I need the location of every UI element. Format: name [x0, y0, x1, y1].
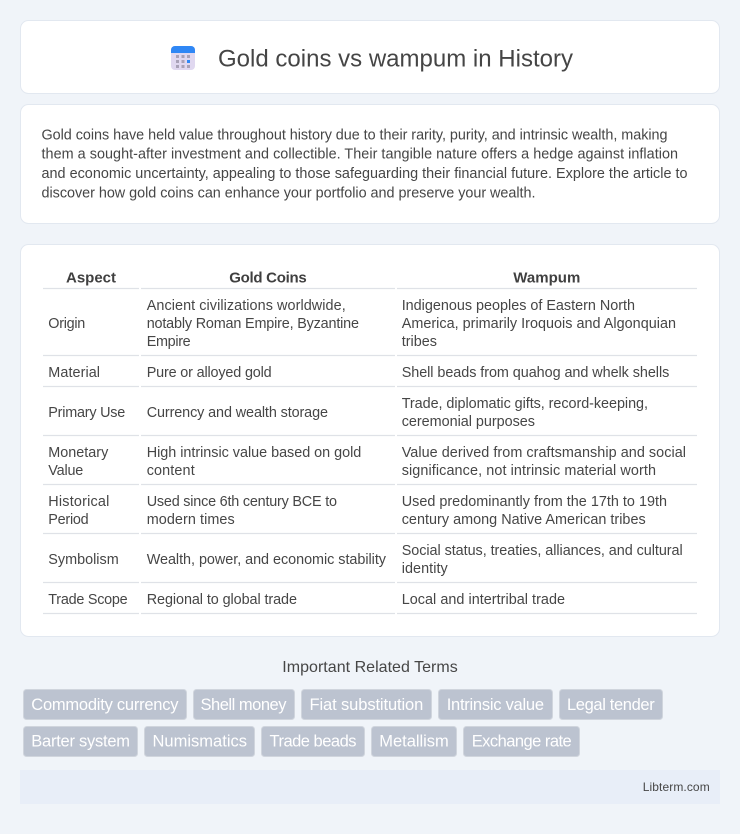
tag — [560, 690, 662, 720]
text block: intro paragraph: and economic uncertainty, appealing to those safeguarding their financial future. Explore the article to — [42, 166, 688, 182]
row: trade scope: Regional to global trade — [147, 592, 297, 608]
row: material: Pure or alloyed gold — [147, 365, 272, 381]
row: primary use: Currency and wealth storage — [147, 405, 328, 421]
row: trade scope: Local and intertribal trade — [402, 592, 565, 608]
row: monetary value: Monetary — [48, 445, 109, 461]
tag: Exchange rate — [472, 733, 572, 751]
row: monetary value — [48, 445, 686, 479]
tag: Commodity currency — [31, 696, 179, 714]
row: symbolism: Symbolism — [48, 552, 119, 568]
row: historical period: Used predominantly from the 17th to 19th — [402, 494, 667, 510]
text block: intro paragraph — [42, 127, 688, 201]
row: historical period: century among Native American tribes — [402, 512, 646, 528]
row: historical period: Historical — [48, 494, 109, 510]
tag: Metallism — [379, 733, 449, 751]
row: monetary value: Value — [48, 463, 83, 479]
tag — [144, 726, 254, 756]
row: symbolism: identity — [402, 561, 448, 577]
row: historical period — [48, 494, 667, 528]
row: historical period: Used since 6th century BCE to — [147, 494, 337, 510]
text block: intro paragraph: discover how gold coins can enhance your portfolio and preserve your wealth. — [42, 185, 536, 201]
text block: intro paragraph: them a sought-after investment and collectible. Their tangible nature offers a hedge against inflation — [42, 146, 678, 162]
row: symbolism: Wealth, power, and economic stability — [147, 552, 387, 568]
heading: related terms: Important Related Terms — [282, 659, 458, 676]
tag — [302, 690, 432, 720]
tag: Numismatics — [152, 733, 247, 751]
row: trade scope — [48, 592, 565, 608]
row: symbolism: Social status, treaties, alliances, and cultural — [402, 543, 683, 559]
panel: header — [20, 20, 720, 94]
tag: Intrinsic value — [447, 696, 544, 714]
row: material: Shell beads from quahog and whelk shells — [402, 365, 669, 381]
text block: intro paragraph: Gold coins have held value throughout history due to their rarity, purity, and intrinsic wealth, making — [42, 127, 668, 143]
row: primary use — [48, 396, 648, 430]
panel: intro — [20, 104, 720, 224]
tag: Barter system — [31, 733, 130, 751]
row: origin: notably Roman Empire, Byzantine — [147, 316, 359, 332]
row: origin: Indigenous peoples of Eastern North — [402, 298, 635, 314]
tag — [464, 726, 580, 756]
row: origin: Empire — [147, 334, 191, 350]
tag: Fiat substitution — [310, 696, 423, 714]
row: material — [48, 365, 669, 381]
tag — [438, 690, 552, 720]
table header: Gold Coins — [229, 270, 307, 287]
panel: comparison table — [20, 244, 720, 636]
row: primary use: Trade, diplomatic gifts, record-keeping, — [402, 396, 648, 412]
row: monetary value: Value derived from craftsmanship and social — [402, 445, 686, 461]
row: historical period: modern times — [147, 512, 235, 528]
title: Gold coins vs wampum in History — [218, 46, 573, 73]
tag: Trade beads — [270, 733, 356, 751]
table header: Wampum — [513, 270, 580, 287]
table header: Aspect — [66, 270, 116, 287]
row: origin: tribes — [402, 334, 437, 350]
footer credit: Libterm.com — [643, 780, 710, 794]
tags: related terms — [24, 690, 662, 756]
row: symbolism — [48, 543, 683, 577]
icon: calendar — [171, 46, 195, 70]
row: origin: Origin — [48, 316, 85, 332]
row: monetary value: significance, not intrinsic material worth — [402, 463, 656, 479]
row: monetary value: High intrinsic value based on gold — [147, 445, 361, 461]
tag — [24, 690, 186, 720]
row: monetary value: content — [147, 463, 195, 479]
row: origin: Ancient civilizations worldwide, — [147, 298, 346, 314]
footer — [20, 770, 720, 804]
table header — [66, 270, 580, 287]
row: historical period: Period — [48, 512, 89, 528]
tag — [262, 726, 364, 756]
row: trade scope: Trade Scope — [48, 592, 128, 608]
row: primary use: Primary Use — [48, 405, 125, 421]
tag — [194, 690, 294, 720]
tag: Legal tender — [567, 696, 655, 714]
tag — [372, 726, 456, 756]
row: material: Material — [48, 365, 100, 381]
tag: Shell money — [200, 696, 287, 714]
row: origin — [48, 298, 676, 350]
row: origin: America, primarily Iroquois and Algonquian — [402, 316, 676, 332]
tag — [24, 726, 138, 756]
row: primary use: ceremonial purposes — [402, 414, 535, 430]
